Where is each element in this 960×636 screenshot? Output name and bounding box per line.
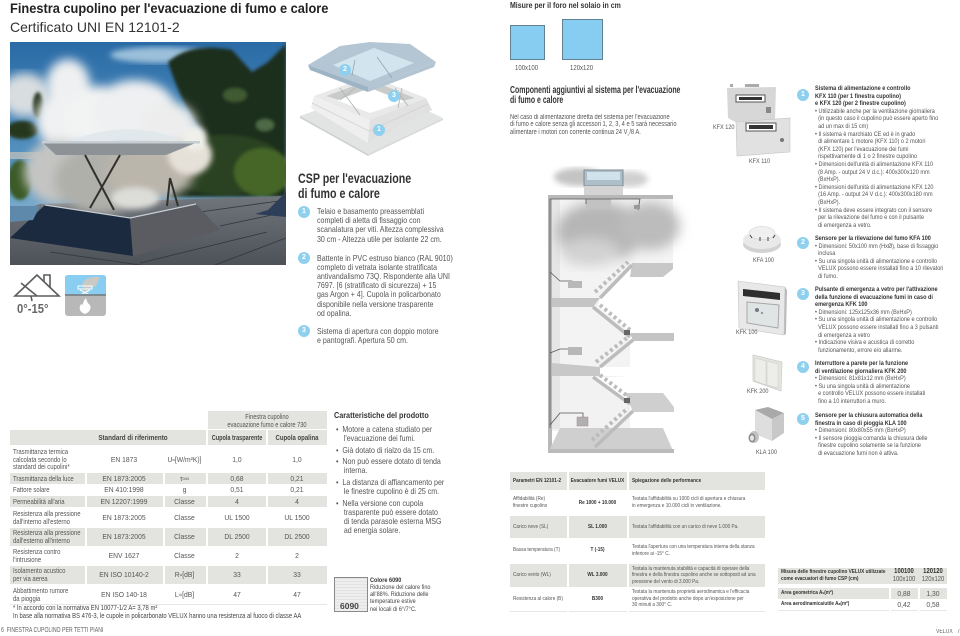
table: EN 12101-2 performance — [510, 472, 765, 612]
text: direct supply note: di fumo e calore senza gli accessori 1, 2, 3, 4 e 5 sarà necessario — [510, 121, 677, 128]
text: glazing: gas Argon + 4]. Cupola in policarbonato — [317, 289, 441, 299]
row: fattore solare: 0,21 — [290, 485, 304, 494]
marker: 2 on dome — [339, 64, 351, 76]
text: glazing: disponibile nella versione trasparente — [317, 299, 433, 309]
table: technical data: evacuazione fumo e calore 730 — [227, 420, 307, 428]
label: KFK 200: KFK 200 — [747, 388, 769, 395]
header row — [10, 430, 327, 445]
colour swatch 6090 — [334, 577, 368, 612]
row: rumore pioggia: da pioggia — [13, 594, 40, 602]
row: carico neve: SL 1.000 — [588, 524, 607, 530]
row: pressione interno: UL 1500 — [284, 513, 310, 522]
row: trasmittanza termica: 1,0 — [232, 455, 242, 464]
row: pressione esterno: DL 2500 — [284, 532, 310, 541]
features list — [336, 424, 432, 443]
icon: roof pitch 0-15 degrees — [13, 274, 61, 316]
row: affidabilita: in emergenza e 10.000 cicli in ventilazione. — [632, 503, 722, 509]
row: isolamento acustico: R [dB] — [175, 570, 194, 579]
text: KFK emergency button — [815, 286, 938, 354]
row: trasmittanza della luce: EN 1873:2005 — [102, 474, 146, 483]
label: KLA 100: KLA 100 — [756, 449, 777, 456]
row: bassa temperatura: inferiore ai -15° C. — [632, 550, 670, 556]
swatch: 120x120 — [562, 19, 603, 60]
text: frame: completi di aletta di fissaggio con — [317, 215, 421, 225]
features list: • Motore a catena studiato per — [336, 424, 432, 434]
component 4 description: 4 — [801, 363, 805, 370]
header row: 120120 — [923, 568, 943, 575]
colour description: temperature estive — [370, 598, 416, 605]
row: pressione interno: dall'interno all'esterno — [13, 516, 70, 526]
component 5 description: 5 — [801, 415, 805, 422]
row: trasmittanza della luce: D65 — [183, 476, 189, 481]
text: KLA rain sensor: di evacuazione fumi non è attiva. — [818, 450, 899, 457]
device: KLA 100 rain sensor — [748, 407, 784, 443]
text: KFA smoke sensor: • Dimensioni: 50x100 mm (HxØ), base di fissaggio — [815, 243, 938, 250]
header row: Cupola opalina — [275, 433, 318, 442]
row: affidabilita — [513, 496, 746, 509]
row: rumore pioggia: Abbattimento rumore — [13, 586, 68, 595]
heading: CSP — [298, 171, 411, 201]
text: KFX power supply: di alimentare 1 motore (KFX 110) o 2 motori — [818, 138, 925, 145]
heading: additional components: Componenti aggiuntivi al sistema per l'evacuazione — [510, 85, 680, 96]
product features: • Già dotato di rialzo da 15 cm. — [336, 444, 434, 454]
colour description: all'88%. Riduzione delle — [370, 591, 428, 598]
row: rumore pioggia: L [dB] — [175, 590, 194, 599]
component 1 description: 1 — [801, 91, 805, 98]
device: KFX 120 and KFX 110 control units — [727, 84, 790, 156]
row: intrusione: ENV 1627 — [109, 551, 139, 560]
device: KFA 100 smoke sensor — [743, 226, 781, 253]
text: glazing: completo di vetrata isolante stratificata — [317, 262, 437, 272]
CSP item 3 — [298, 325, 439, 345]
row: aerodynamic area: Area aerodinamica/utile A (m²) — [781, 601, 849, 607]
row: trasmittanza della luce: 0,68 — [230, 474, 244, 483]
row: trasmittanza termica: U [W/m²K)] — [167, 455, 202, 464]
text: frame: 30 cm - Altezza utile per isolante 22 cm. — [317, 234, 442, 244]
text: KFK 200 switch: e controllo VELUX possono essere installati — [818, 390, 925, 397]
row: pressione esterno — [10, 528, 327, 546]
text: KLA rain sensor — [815, 412, 928, 457]
header row: come evacuatori di fumo CSP (cm) — [781, 576, 858, 582]
text: KFX power supply: (16 Amp. - output 24 V d.c.): 400x300x180 mm — [818, 191, 933, 198]
row: aerodynamic area: a — [839, 601, 840, 606]
text: KFK emergency button: funzionamento, errore e/o allarme. — [818, 347, 903, 354]
text: KFX power supply: • Il sistema è marchiato CE ed è in grado — [815, 131, 915, 138]
text: KLA rain sensor: Sensore per la chiusura automatica della — [815, 412, 922, 419]
text: KFK emergency button: • Dimensioni: 125x125x36 mm (BxHxP) — [815, 309, 912, 316]
features list: l'evacuazione dei fumi. — [344, 433, 415, 443]
row: pressione interno — [13, 509, 310, 526]
text: KFK emergency button: di emergenza a vetro — [818, 332, 870, 339]
text: KFA smoke sensor — [815, 235, 943, 280]
text: direct supply note — [510, 114, 677, 137]
row: bassa temperatura: Testata l'apertura con una temperatura interna della stanza — [632, 544, 755, 550]
row: geometric area — [778, 588, 947, 599]
label: KFA 100: KFA 100 — [753, 257, 774, 264]
heading: additional components — [510, 85, 680, 106]
row: carico vento — [510, 564, 765, 587]
row: intrusione: Classe — [174, 551, 195, 560]
row: affidabilita: finestre cupolino — [513, 503, 547, 509]
row: aerodynamic area — [778, 599, 947, 611]
component 3 description — [797, 286, 938, 354]
product features: • Non può essere dotato di tenda — [336, 456, 441, 466]
row: pressione esterno: Resistenza alla pressione — [13, 528, 81, 537]
text: KFX power supply: • Utilizzabile anche per la ventilazione giornaliera — [815, 108, 935, 115]
text: KFK 200 switch: fino a 10 interruttori a muro. — [818, 398, 886, 405]
page footer left: 6 FINESTRA CUPOLINO PER TETTI PIANI — [1, 627, 103, 634]
product features: le finestre cupolino è di 25 cm. — [344, 486, 439, 496]
CSP item 3: 3 — [302, 327, 306, 334]
row: permeabilita: 4 — [295, 497, 299, 506]
text: KFA smoke sensor: di fumo. — [818, 273, 838, 280]
text: glazing: 7697. [6 (stratificato di sicurezza) + 15 — [317, 280, 436, 290]
component 3 description: 3 — [801, 290, 805, 297]
row: carico neve: Testata l'affidabilità con un carico di neve 1.000 Pa. — [632, 524, 739, 530]
component 1 description — [797, 85, 938, 229]
row: bassa temperatura — [510, 538, 765, 563]
table footnotes — [13, 605, 302, 620]
marker: 2 on dome: 2 — [343, 66, 347, 73]
text: KFK emergency button: • Su una singola unità di alimentazione e controllo — [815, 316, 937, 323]
row: pressione interno: Resistenza alla pressione — [13, 509, 81, 518]
illustration: CSP window with open dome — [300, 42, 443, 156]
label: KFX 110: KFX 110 — [749, 158, 770, 165]
heading: CSP: CSP per l'evacuazione — [298, 171, 411, 186]
table: technical data: Finestra cupolino — [245, 412, 289, 421]
text: KFK emergency button: emergenza KFK 100 — [815, 301, 868, 308]
text: KFX power supply: • Il sistema deve essere integrato con il sensore — [815, 206, 932, 214]
row: resistenza al calore: Testata la mantenuta proprietà aerodinamica e l'efficacia — [632, 589, 749, 595]
row: permeabilita: Classe — [174, 497, 195, 506]
text: KFK 200 switch — [815, 360, 925, 405]
text: direct supply note: Nel caso di alimentazione diretta del sistema per l'evacuazione — [510, 114, 670, 120]
row: pressione esterno: EN 1873:2005 — [102, 532, 146, 541]
row: fattore solare: 0,51 — [230, 485, 244, 494]
row: bassa temperatura: T (-15) — [590, 547, 605, 553]
heading: additional components: di fumo e calore — [510, 94, 563, 106]
photo: smoke ventilator on flat roof — [10, 42, 286, 265]
component 2 description: 2 — [801, 239, 805, 246]
text: KFK emergency button: Pulsante di emergenza a vetro per l'attivazione — [815, 286, 938, 293]
marker: 1 on frame — [373, 124, 385, 136]
row: geometric area: 1,30 — [926, 589, 940, 598]
row: trasmittanza termica: EN 1873 — [111, 455, 137, 464]
product features: • La distanza di affiancamento per — [336, 476, 444, 486]
row: carico neve: Carico neve (SL) — [513, 524, 548, 530]
text: KFX power supply: • Dimensioni dell'unità di alimentazione KFX 110 — [815, 161, 933, 168]
header row — [510, 472, 765, 490]
text: KFX power supply: e KFX 120 (per 2 finestre cupolino) — [815, 100, 906, 107]
colour description: Riduzione del calore fino — [370, 584, 431, 591]
text: glazing — [317, 252, 453, 318]
row: carico vento: WL 3.000 — [587, 572, 608, 578]
header row: Misura delle finestre cupolino VELUX utilizzate — [781, 569, 885, 575]
header row: Standard di riferimento — [98, 433, 168, 442]
row: isolamento acustico: 33 — [293, 570, 301, 579]
row: rumore pioggia: 47 — [233, 590, 241, 599]
row: isolamento acustico: per via aerea — [13, 574, 48, 583]
text: KLA rain sensor: finestra in caso di pioggia KLA 100 — [815, 420, 907, 427]
text: direct supply note: alimentare i motori con corrente continua 24 V=/8 A. — [510, 129, 641, 137]
text: frame — [317, 206, 444, 244]
label: pitch range: 0°-15° — [17, 302, 49, 316]
product features: interna. — [344, 465, 367, 475]
row: geometric area: v — [822, 590, 824, 595]
row: intrusione — [13, 547, 299, 564]
product features: ad energia solare. — [344, 525, 400, 535]
row: isolamento acustico: Isolamento acustico — [13, 566, 65, 575]
row: carico vento: Testata la mantenuta stabilità e capacità di operare della — [632, 566, 749, 572]
text: frame: Telaio e basamento preassemblati — [317, 206, 424, 216]
marker: 3 on mechanism: 3 — [392, 92, 396, 99]
row: aerodynamic area: 0,58 — [926, 600, 940, 609]
label: 120x120: 120x120 — [570, 65, 593, 72]
CSP item 2: 2 — [302, 254, 306, 261]
row: intrusione: Resistenza contro — [13, 547, 60, 556]
row: trasmittanza termica: standard dei cupolini* — [13, 462, 70, 471]
header row: Spiegazione delle performance — [632, 478, 701, 484]
text: KFX power supply: (8 Amp. - output 24 V d.c.): 400x300x120 mm — [818, 169, 930, 176]
text: KFA smoke sensor: Sensore per la rilevazione del fumo KFA 100 — [815, 235, 931, 242]
row: trasmittanza termica — [13, 447, 302, 471]
header row: Evacuatore fumi VELUX — [571, 478, 624, 484]
text: KFX power supply: (KFX 120) per l'evacuazione dei fumi — [818, 146, 908, 153]
row: trasmittanza termica: w — [172, 457, 175, 462]
row: pressione interno: UL 1500 — [224, 513, 250, 522]
header row: 100x100 — [893, 576, 915, 583]
row: affidabilita: Testata l'affidabilità su 1000 cicli di apertura e chiusura — [632, 496, 745, 502]
text: KFX power supply: KFX 110 (per 1 finestra cupolino) — [815, 93, 901, 100]
icon: smoke and fire function — [65, 275, 106, 316]
row: intrusione: l'intrusione — [13, 555, 41, 564]
row: rumore pioggia: IA — [179, 592, 182, 597]
row: fattore solare — [13, 485, 304, 494]
table: aerodynamic areas — [778, 568, 947, 611]
title: Finestra cupolino per l'evacuazione di fumo e calore — [10, 0, 328, 16]
text: KFX power supply — [815, 85, 938, 229]
marker: 3 on mechanism — [388, 90, 400, 102]
text: KFK emergency button: della funzione di evacuazione fumi in caso di — [815, 294, 933, 301]
label: KFX 120: KFX 120 — [713, 124, 735, 131]
header row: Cupola trasparente — [212, 433, 262, 442]
text: KFK emergency button: • Indicazione visiva e acustica di corretto — [815, 339, 914, 346]
row: trasmittanza della luce: Trasmittanza della luce — [13, 474, 74, 483]
text: KLA rain sensor: • Dimensioni: 80x80x55 mm (BxHxP) — [815, 427, 906, 434]
text: frame: scanalatura per viti. Altezza complessiva — [317, 224, 444, 234]
text: KFX power supply: Sistema di alimentazione e controllo — [815, 85, 910, 92]
row: resistenza al calore: operativa del prodotto anche dopo un'esposizione per — [632, 596, 744, 602]
row: resistenza al calore: Resistenza al calore (B) — [513, 596, 563, 602]
text: opening: Sistema di apertura con doppio motore — [317, 326, 439, 336]
row: intrusione: 2 — [235, 551, 239, 560]
marker: 1 on frame: 1 — [377, 126, 381, 133]
row: carico neve — [510, 516, 765, 538]
text: opening: e pantografi. Apertura 50 cm. — [317, 335, 408, 345]
text: KLA rain sensor: • Il sensore pioggia comanda la chiusura delle — [815, 435, 928, 442]
illustration: stairwell with smoke — [548, 166, 686, 453]
header row: 120x120 — [922, 576, 944, 583]
product features: trasparente può essere dotato — [344, 507, 438, 517]
header row — [778, 568, 947, 584]
row: pressione esterno: Classe — [174, 532, 195, 541]
text: opening — [317, 326, 439, 345]
text: KFX power supply: • Dimensioni dell'unità di alimentazione KFX 120 — [815, 184, 933, 191]
text: KFX power supply: ad un max di 15 cm) — [818, 123, 868, 130]
row: aerodynamic area: 0,42 — [897, 600, 911, 609]
text: KFK 200 switch: • Dimensioni: 81x81x12 mm (BxHxP) — [815, 375, 906, 382]
header row: 100100 — [894, 568, 914, 575]
row: permeabilita — [10, 496, 327, 507]
header: product column — [207, 411, 327, 429]
component 2 description — [797, 235, 943, 280]
table footnotes: In base alla normativa BS 476-3, le cupole in policarbonato VELUX hanno una resistenza al fuoco di classe AA — [13, 613, 301, 620]
row: trasmittanza della luce: 0,21 — [290, 474, 304, 483]
label: KFK 100: KFK 100 — [736, 329, 758, 336]
row: affidabilita: Affidabilità (Re) — [513, 496, 545, 502]
row: trasmittanza della luce — [10, 473, 327, 484]
product features: • Nella versione con cupola — [336, 498, 423, 508]
row: trasmittanza termica: Trasmittanza termica — [13, 447, 68, 456]
row: permeabilita: 4 — [235, 497, 239, 506]
row: trasmittanza termica: calcolata secondo lo — [13, 455, 67, 464]
row: fattore solare: EN 410:1998 — [104, 485, 144, 494]
label: 100x100: 100x100 — [515, 65, 538, 72]
text: KFX power supply: (BxHxP). — [818, 176, 840, 183]
header row: Parametri EN 12101-2 — [513, 478, 561, 484]
subtitle: Certificato UNI EN 12101-2 — [10, 19, 180, 35]
row: fattore solare: Fattore solare — [13, 485, 50, 494]
row: isolamento acustico — [10, 566, 327, 584]
text: KFX power supply: per la rilevazione del fumo e con il pulsante — [818, 214, 924, 221]
row: resistenza al calore — [510, 587, 765, 612]
row: permeabilita: Permeabilità all'aria — [13, 497, 65, 506]
swatch label: 6090 — [340, 601, 359, 611]
row: pressione esterno: DL 2500 — [224, 532, 250, 541]
row: isolamento acustico: EN ISO 10140-2 — [99, 570, 149, 579]
row: carico vento: finestra e della finestra cupolino anche se sottoposti ad una — [632, 572, 756, 578]
device: KFK 200 wall switch — [752, 354, 782, 392]
colour description: Colore 6090 — [370, 576, 401, 584]
text: glazing: Battente in PVC estruso bianco (RAL 9010) — [317, 252, 453, 262]
product features — [334, 410, 444, 535]
product features: di tenda parasole esterna MSG — [344, 516, 442, 526]
row: bassa temperatura: Bassa temperatura (T) — [513, 547, 560, 553]
heading: opening sizes: Misure per il foro nel solaio in cm — [510, 0, 621, 10]
row: trasmittanza termica: 1,0 — [292, 455, 302, 464]
text: KFX power supply: rispettivamente di 1 o 2 finestre cupolino — [818, 153, 917, 160]
text: KFX power supply: di emergenza a vetro. — [818, 222, 872, 229]
colour description: nei locali di 6°/7°C. — [370, 606, 416, 613]
row: intrusione: 2 — [295, 551, 299, 560]
page footer right: VELUX 7 — [936, 629, 960, 635]
row: fattore solare: g — [183, 485, 186, 494]
text: glazing: antivandalismo 73Q. Rispondente alla UNI — [317, 271, 450, 281]
swatch: 100x100 — [510, 25, 545, 60]
row: pressione interno: Classe — [174, 513, 195, 522]
heading: features: Caratteristiche del prodotto — [334, 410, 429, 420]
text: KLA rain sensor: finestre cupolino solamente se la funzione — [818, 442, 921, 449]
text: KFX power supply: (BxHxP). — [818, 199, 840, 206]
CSP item 2 — [298, 252, 453, 318]
row: isolamento acustico: w — [180, 572, 182, 577]
heading: CSP: di fumo e calore — [298, 186, 380, 201]
row: pressione interno: EN 1873:2005 — [102, 513, 146, 522]
text: glazing: od opalina. — [317, 308, 352, 318]
component 5 description — [797, 412, 928, 457]
row: pressione esterno: dall'esterno all'interno — [13, 536, 70, 545]
row: carico vento: Carico vento (WL) — [513, 572, 551, 578]
table: technical data — [10, 411, 327, 605]
row: resistenza al calore: 30 minuti a 300° C. — [632, 602, 672, 608]
row: rumore pioggia — [10, 585, 327, 605]
device: KFK 100 emergency button — [738, 280, 787, 336]
component 4 description — [797, 360, 925, 405]
text: KFK 200 switch: Interruttore a parete per la funzione — [815, 360, 908, 367]
text: KFK emergency button: VELUX possono essere installati fino a 3 pulsanti — [818, 324, 938, 331]
row: permeabilita: EN 12207:1999 — [101, 497, 147, 506]
row: trasmittanza della luce: τ — [180, 474, 183, 483]
text: KFA smoke sensor: • Su una singola unità di alimentazione e controllo — [815, 258, 937, 265]
row: affidabilita: Re 1000 + 10.000 — [579, 500, 616, 506]
CSP item 1 — [298, 206, 444, 244]
text: KFK 200 switch: di ventilazione giornaliera KFK 200 — [815, 368, 906, 375]
row: isolamento acustico: 33 — [233, 570, 241, 579]
text: KFX power supply: (in questo caso il cupolino può essere aperto fino — [818, 115, 938, 122]
row: geometric area: 0,88 — [897, 589, 911, 598]
text: KFA smoke sensor: VELUX possono essere installati fino a 10 rilevatori — [818, 265, 943, 272]
row: resistenza al calore: B300 — [592, 596, 603, 602]
row: geometric area: Area geometrica A (m²) — [781, 590, 833, 596]
row: carico vento: pressione del vento di 3.000 Pa. — [632, 579, 699, 585]
table footnotes: * In accordo con la normativa EN 10077-1/2 A= 3,78 m² — [13, 605, 157, 612]
text: KFK 200 switch: • Su una singola unità di alimentazione — [815, 383, 910, 390]
colour description — [370, 576, 431, 613]
CSP item 1: 1 — [302, 208, 306, 215]
row: rumore pioggia: 47 — [293, 590, 301, 599]
text: KFA smoke sensor: inclusa — [818, 250, 835, 257]
row: rumore pioggia: EN ISO 140-18 — [101, 590, 147, 599]
